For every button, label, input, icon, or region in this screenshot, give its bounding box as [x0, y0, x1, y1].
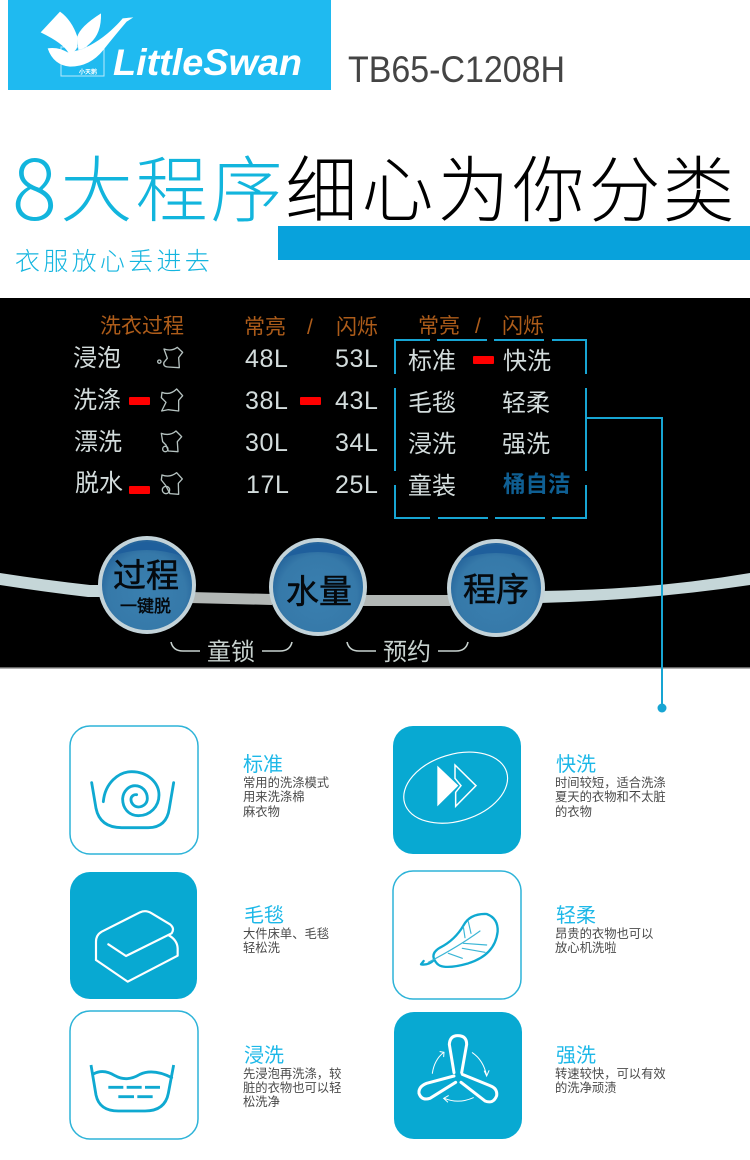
text: quick: 夏天的衣物和不太脏 — [555, 789, 666, 804]
process labels — [73, 345, 123, 497]
icon: tub with spiral — [92, 772, 174, 828]
text: quick: 快洗 — [556, 753, 596, 776]
model number: TB65-C1208H — [348, 49, 565, 90]
text: standard — [243, 753, 329, 819]
text: gentle — [555, 904, 653, 955]
text: blanket: 毛毯 — [244, 904, 284, 927]
card: gentle — [393, 871, 653, 999]
program labels: 毛毯 — [408, 390, 456, 417]
water level values: 17L — [246, 471, 290, 499]
icons: shirts — [158, 347, 183, 494]
icon: swan — [41, 12, 133, 67]
text: soak — [243, 1044, 341, 1109]
program labels: 轻柔 — [502, 390, 550, 417]
process labels: 脱水 — [75, 470, 123, 497]
button: process: 过程 — [113, 557, 179, 594]
text: blanket — [243, 904, 329, 955]
button: process — [100, 538, 194, 632]
label: child lock — [171, 639, 292, 666]
title: 细心为你分类 — [286, 152, 735, 232]
label: schedule — [347, 639, 468, 666]
text: soak: 脏的衣物也可以轻 — [243, 1080, 341, 1095]
logo: LittleSwan — [113, 42, 302, 83]
button: process: 一键脱 — [120, 597, 171, 616]
icon: feather — [421, 914, 498, 967]
text: strong: 强洗 — [556, 1044, 596, 1067]
text: strong: 的洗净顽渍 — [555, 1080, 616, 1095]
heading: water level: 闪烁 — [336, 316, 378, 339]
text: strong — [555, 1044, 666, 1095]
label: child lock: 童锁 — [207, 639, 255, 666]
indicators: red lights — [129, 356, 494, 494]
water level values: 53L — [335, 345, 379, 373]
label: schedule: 预约 — [383, 639, 431, 666]
highlight bracket — [395, 340, 586, 518]
water level values: 25L — [335, 471, 379, 499]
water level values: 38L — [245, 387, 289, 415]
heading: wash process: 洗衣过程 — [100, 315, 184, 338]
heading: program: 常亮 — [418, 315, 460, 338]
process labels: 洗涤 — [73, 387, 121, 414]
card: blanket — [70, 872, 329, 999]
text: strong: 转速较快，可以有效 — [555, 1066, 666, 1081]
logo — [8, 0, 331, 90]
water level values: 48L — [245, 345, 289, 373]
text: soak: 浸洗 — [244, 1044, 284, 1067]
text: soak: 先浸泡再洗涤，较 — [243, 1066, 341, 1081]
title: 大程序 — [60, 152, 283, 232]
text: standard: 标准 — [243, 753, 283, 776]
title accent bar — [278, 226, 750, 260]
icon: tub with water — [91, 1065, 174, 1111]
text: standard: 常用的洗涤模式 — [243, 775, 329, 790]
text: soak: 松洗净 — [243, 1095, 280, 1109]
heading: water level: 常亮 — [244, 316, 286, 339]
text: gentle: 放心机洗啦 — [555, 940, 616, 955]
button: water: 水量 — [286, 573, 352, 610]
water level values: 43L — [335, 387, 379, 415]
program labels: 强洗 — [502, 431, 550, 458]
process labels: 漂洗 — [74, 429, 122, 456]
text: blanket: 轻松洗 — [243, 941, 280, 955]
water level values: 30L — [245, 429, 289, 457]
card: quick — [393, 726, 666, 854]
icon: fast forward — [395, 740, 516, 835]
logo: 小天鹅 — [79, 68, 97, 76]
text: standard: 麻衣物 — [243, 804, 280, 819]
text: gentle: 轻柔 — [556, 904, 596, 927]
program labels — [408, 348, 571, 500]
card: standard — [70, 726, 329, 854]
icon: folded blanket — [96, 911, 178, 982]
icon: fan with arrows — [419, 1036, 497, 1102]
connector line — [586, 418, 666, 712]
subtitle: 衣服放心丢进去 — [15, 248, 213, 276]
text: quick — [555, 753, 666, 819]
text: gentle: 昂贵的衣物也可以 — [555, 926, 653, 941]
title: 8 — [12, 124, 57, 245]
text: standard: 用来洗涤棉 — [243, 790, 304, 804]
program labels: 童装 — [408, 473, 456, 500]
button: program: 程序 — [463, 571, 529, 608]
program labels: 桶自洁 — [503, 472, 571, 497]
water level values — [245, 345, 379, 499]
text: quick: 时间较短，适合洗涤 — [555, 775, 666, 790]
program labels: 快洗 — [503, 348, 551, 375]
heading: program: 闪烁 — [502, 315, 544, 338]
card: strong — [394, 1012, 666, 1139]
button: water — [271, 540, 365, 634]
program labels: 标准 — [408, 348, 456, 375]
program labels: 浸洗 — [408, 431, 456, 458]
text: blanket: 大件床单、毛毯 — [243, 927, 329, 941]
button: program — [449, 541, 543, 635]
text: quick: 的衣物 — [555, 804, 592, 819]
band behind buttons — [0, 573, 750, 606]
water level values: 34L — [335, 429, 379, 457]
card: soak — [70, 1011, 341, 1139]
heading: program: / — [475, 315, 481, 338]
process labels: 浸泡 — [73, 345, 121, 372]
heading: water level: / — [307, 316, 313, 339]
panel: control panel photo — [0, 298, 750, 668]
